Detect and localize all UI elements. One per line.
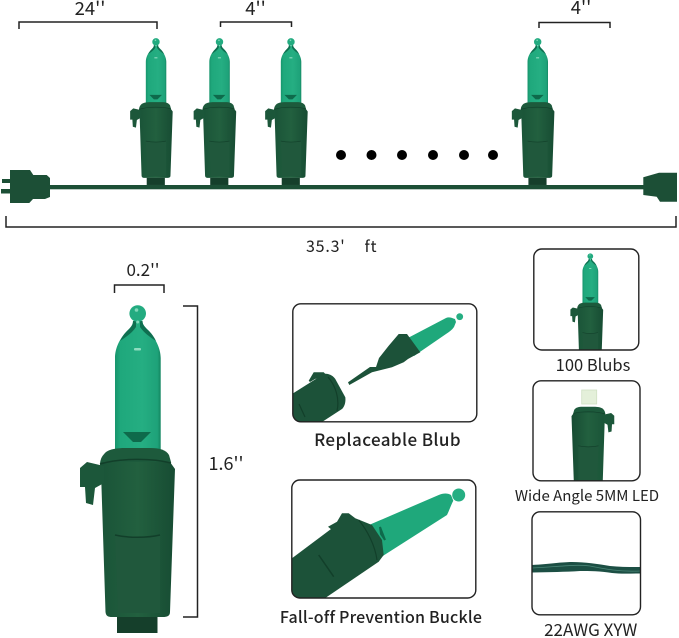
plug: left end xyxy=(1,170,50,203)
dimension: total length xyxy=(6,216,676,257)
ellipsis dots xyxy=(336,150,498,160)
large bulb xyxy=(80,305,175,633)
dimension: 4 inch spacing xyxy=(220,0,292,27)
panel: 100 bulbs xyxy=(533,248,640,351)
label: 100 bulbs: 100 Blubs xyxy=(556,352,631,376)
label: fall-off buckle: Fall-off Prevention Buckle xyxy=(280,604,482,628)
bulb 1 xyxy=(130,38,173,185)
label: replaceable bulb: Replaceable Blub xyxy=(314,426,461,451)
bulb 3 xyxy=(265,38,308,185)
panel: LED xyxy=(533,381,640,490)
dimension: total length: 35.3' ft xyxy=(306,233,377,257)
string wire xyxy=(48,185,648,189)
label: LED: Wide Angle 5MM LED xyxy=(515,485,659,506)
panel: wire xyxy=(532,512,640,615)
dimension: bulb height xyxy=(183,306,244,617)
bulb 2 xyxy=(194,38,236,185)
panel: replaceable bulb xyxy=(292,304,477,422)
dimension: bulb width: 0.2'' xyxy=(126,256,160,281)
dimension: bulb width xyxy=(114,256,164,293)
dimension: bulb height: 1.6'' xyxy=(208,450,244,476)
dimension: 4 inch end xyxy=(539,0,610,28)
panel: fall-off buckle xyxy=(292,480,476,598)
connector: right end xyxy=(643,173,677,202)
dimension: 24 inch lead xyxy=(19,0,157,29)
bulb 4 xyxy=(512,38,554,185)
